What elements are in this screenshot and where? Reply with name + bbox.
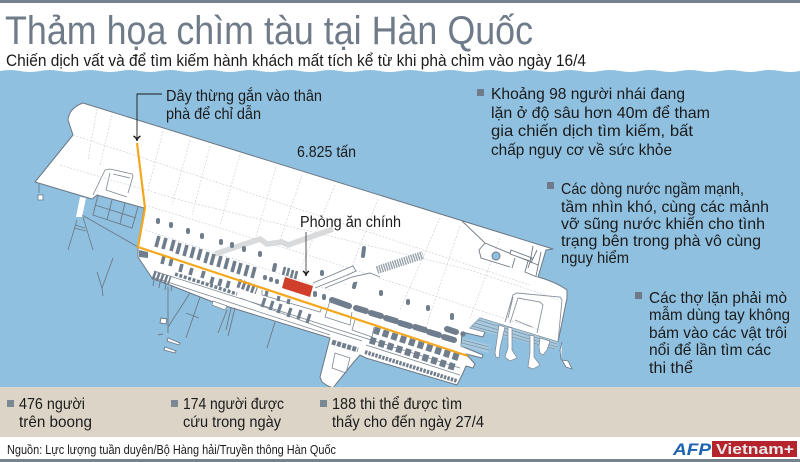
logo: AFP Vietnam: Vietnam+ bbox=[716, 441, 794, 458]
small boat bbox=[212, 301, 227, 310]
bullet block: currents: nguy hiểm bbox=[561, 249, 629, 267]
subtitle: Chiến dịch vất và để tìm kiếm hành khách mất tích kể từ khi phà chìm vào ngày 16/4 bbox=[6, 51, 586, 70]
lower rows bbox=[139, 250, 460, 381]
scattered deck blocks bbox=[158, 220, 452, 318]
source line: Nguồn: Lực lượng tuần duyên/Bộ Hàng hải/Truyền thông Hàn Quốc bbox=[7, 442, 336, 457]
aft deck house bbox=[93, 169, 133, 197]
stats band bbox=[0, 387, 800, 437]
bullet block: bare hands: mẫm dùng tay không bbox=[649, 305, 790, 324]
sea background bbox=[0, 70, 800, 387]
guide rope bbox=[137, 143, 468, 356]
bullet block: currents bbox=[547, 181, 769, 267]
bottom bar bbox=[0, 459, 800, 462]
anchor tackle bbox=[158, 318, 180, 353]
drag line and float bbox=[560, 342, 572, 369]
superstructure lines bbox=[152, 271, 460, 375]
stern cut-out grid bbox=[82, 195, 138, 247]
stat: bodies: thấy cho đến ngày 27/4 bbox=[332, 414, 484, 431]
bullet block: divers: chấp nguy cơ về sức khỏe bbox=[491, 142, 672, 159]
bullet block: bare hands: bám vào các vật trôi bbox=[649, 325, 787, 342]
callout: rope label bbox=[166, 86, 322, 123]
bow fender bbox=[38, 184, 43, 200]
callout: rope label: phà để chỉ dẫn bbox=[166, 104, 261, 123]
bullet block: bare hands: Các thợ lặn phải mò bbox=[649, 290, 787, 307]
bullet block: divers: Khoảng 98 người nhái đang bbox=[491, 86, 685, 103]
bullet block: currents: trạng bên trong phà vô cùng bbox=[561, 233, 761, 250]
deck blocks upper row bbox=[156, 236, 255, 278]
ship bbox=[35, 103, 572, 388]
bullet block: bare hands bbox=[635, 290, 790, 377]
rudders and propellers bbox=[495, 325, 550, 369]
stat: on board: 476 người bbox=[19, 396, 85, 413]
deck grid bbox=[60, 109, 560, 330]
bullet block: divers: lặn ở độ sâu hơn 40m để tham bbox=[491, 104, 710, 122]
bullet block: bare hands: thi thể bbox=[649, 359, 693, 377]
grey pivot bbox=[460, 331, 466, 337]
bullet block: divers: gia chiến dịch tìm kiếm, bất bbox=[491, 123, 694, 140]
stern mechanism bbox=[462, 221, 541, 277]
tonnage label: 6.825 tấn bbox=[297, 144, 356, 161]
bullet block: currents: Các dòng nước ngầm mạnh, bbox=[561, 181, 744, 198]
bullet block: bare hands: nổi để lần tìm các bbox=[649, 341, 771, 359]
lifeboat deck detail bbox=[332, 353, 350, 373]
bullet block: currents: vỡ sũng nước khiến cho tình bbox=[561, 216, 765, 233]
crane pole bbox=[68, 197, 93, 250]
stat: rescued: cứu trong ngày bbox=[183, 414, 281, 431]
stat: bodies: 188 thi thể được tìm bbox=[332, 395, 462, 413]
large deck bars bbox=[332, 300, 456, 340]
logo: AFP Vietnam: AFP bbox=[672, 440, 712, 459]
stat: on board: trên boong bbox=[19, 414, 92, 431]
logo: AFP Vietnam bbox=[672, 440, 797, 459]
dining room neighbour ticks bbox=[283, 267, 297, 279]
callout: main dining room: Phòng ăn chính bbox=[300, 214, 401, 231]
callout arrow: dining room bbox=[303, 232, 309, 276]
bullet block: divers bbox=[477, 86, 710, 159]
top bar bbox=[0, 0, 800, 3]
title: Thảm họa chìm tàu tại Hàn Quốc bbox=[5, 9, 533, 53]
stat: rescued: 174 người được bbox=[183, 396, 284, 413]
bullet block: currents: tầm nhìn khó, cùng các mảnh bbox=[561, 199, 769, 216]
water hatching bbox=[461, 318, 558, 353]
port side masts bbox=[97, 258, 275, 348]
stat: rescued bbox=[171, 396, 284, 431]
stern ramp outline bbox=[505, 293, 562, 342]
hull bbox=[35, 103, 567, 388]
corridor smear bbox=[215, 229, 333, 254]
stair hatching bbox=[377, 255, 423, 270]
stat: on board bbox=[7, 396, 92, 431]
callout: rope label: Dây thừng gắn vào thân bbox=[166, 86, 322, 105]
main dining room marker bbox=[282, 277, 313, 297]
dining stairs bbox=[313, 266, 380, 288]
stat: bodies bbox=[320, 395, 484, 431]
callout arrow: rope bbox=[134, 94, 162, 141]
